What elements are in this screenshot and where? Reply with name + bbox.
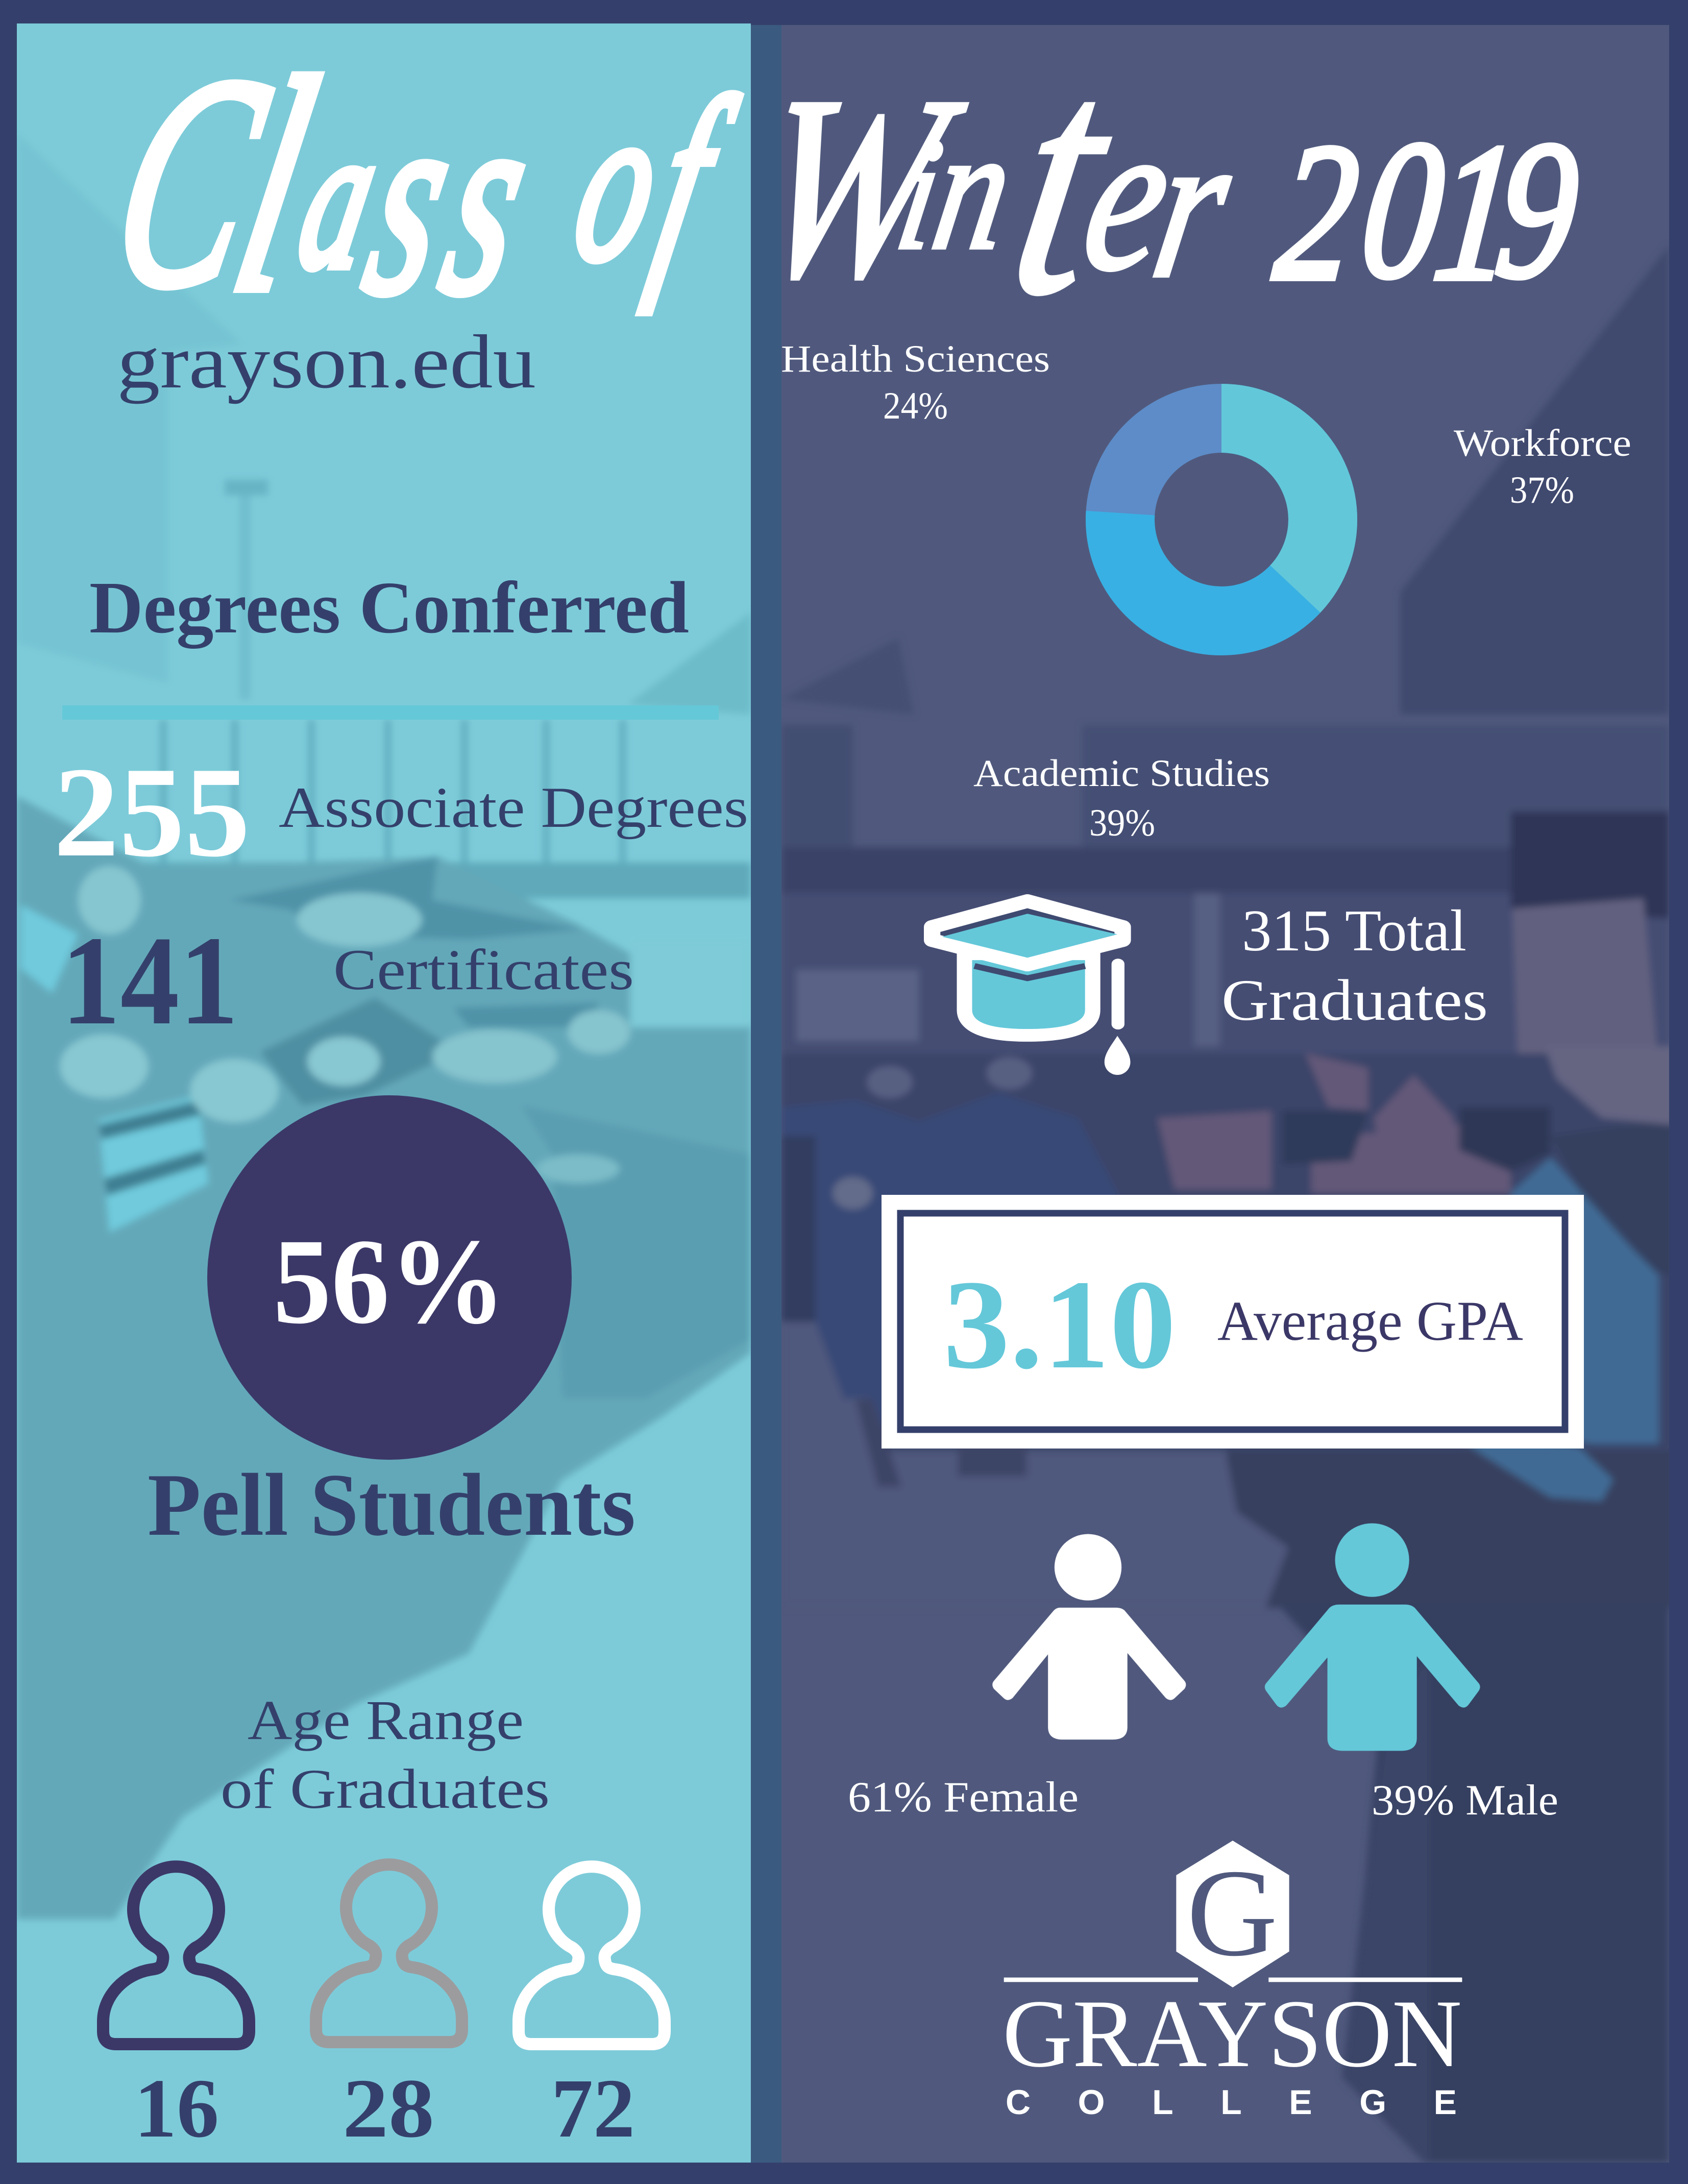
stat: 255 associate degrees: Associate Degrees: [279, 776, 748, 840]
stat: 255 associate degrees: [54, 741, 748, 884]
age numbers: 28: [343, 2062, 434, 2155]
title word: Winter: i: [887, 107, 953, 282]
stat: total graduates: Graduates: [1221, 968, 1488, 1033]
callout: 56 percent circle: [207, 1095, 572, 1460]
title words: Class of: f: [637, 50, 752, 313]
title words: Class of: s: [423, 50, 552, 350]
panel: average gpa box: [882, 1195, 1584, 1449]
icon: male figure: [1265, 1523, 1480, 1751]
icon: female figure: [992, 1534, 1186, 1739]
website url: grayson.edu: [117, 320, 536, 404]
heading underline bar: [62, 705, 719, 720]
title word: 2019: 2019: [1268, 101, 1587, 321]
chart label: health sciences: [781, 338, 1050, 427]
stat: total graduates: 315 Total: [1242, 898, 1466, 963]
title words: Class of: a: [284, 85, 395, 311]
title words: Class of: s: [347, 50, 476, 350]
logo: grayson college: GRAYSON: [1002, 1980, 1462, 2088]
title word: Winter: W: [738, 43, 981, 331]
panel: average gpa box: 3.10: [943, 1254, 1176, 1395]
heading: age range of graduates: of Graduates: [221, 1758, 550, 1820]
panel: center divider strip: [751, 25, 781, 2163]
title words: Class of: o: [558, 59, 680, 307]
heading: age range of graduates: Age Range: [248, 1689, 524, 1751]
title words: Class of: C: [91, 15, 290, 349]
age numbers: 16: [134, 2062, 219, 2155]
stat: 141 certificates: 141: [61, 910, 238, 1051]
stat: total graduates: [1221, 898, 1488, 1033]
label: female share: 61% Female: [848, 1773, 1079, 1821]
logo: grayson college: COLLEGE: [1006, 2083, 1457, 2122]
chart label: academic studies: 39%: [1089, 802, 1155, 844]
title word: Winter: t: [992, 0, 1139, 363]
title word: Winter: e: [1069, 78, 1187, 315]
chart label: workforce: 37%: [1510, 469, 1574, 511]
heading: degrees conferred: Degrees Conferred: [89, 567, 689, 649]
chart label: health sciences: 24%: [883, 385, 948, 427]
title word: Winter: n: [922, 93, 1025, 285]
title words: Class of: l: [213, 15, 338, 355]
panel: right photo background: [781, 25, 1675, 2163]
panel: average gpa box: Average GPA: [1217, 1290, 1523, 1352]
chart label: academic studies: Academic Studies: [973, 752, 1270, 795]
icon: person outline grey: [316, 1864, 462, 2042]
logo: grayson college: [1002, 1841, 1462, 2122]
age numbers: [134, 2062, 635, 2155]
chart label: workforce: Workforce: [1454, 422, 1631, 464]
stat: 255 associate degrees: 255: [54, 741, 250, 884]
stat: 141 certificates: Certificates: [333, 938, 634, 1002]
label: male share: 39% Male: [1372, 1776, 1558, 1824]
chart label: academic studies: [973, 752, 1270, 844]
chart label: workforce: [1454, 422, 1631, 511]
panel: left photo background: [17, 23, 751, 2163]
age numbers: 72: [551, 2062, 635, 2155]
heading: age range of graduates: [221, 1689, 550, 1820]
callout: 56 percent circle: 56%: [273, 1213, 506, 1349]
icon: person outline dark: [103, 1867, 249, 2044]
chart label: health sciences: Health Sciences: [781, 338, 1050, 380]
icon: graduation cap: [932, 901, 1130, 1075]
title word: Winter: r: [1140, 90, 1249, 322]
age icons: [103, 1864, 665, 2044]
donut chart: [1120, 419, 1323, 621]
logo: grayson college: G: [1187, 1844, 1278, 1982]
heading: pell students: Pell Students: [148, 1455, 635, 1554]
icon: person outline white: [519, 1867, 665, 2044]
stat: 141 certificates: [61, 910, 634, 1051]
title: [90, 0, 1587, 363]
